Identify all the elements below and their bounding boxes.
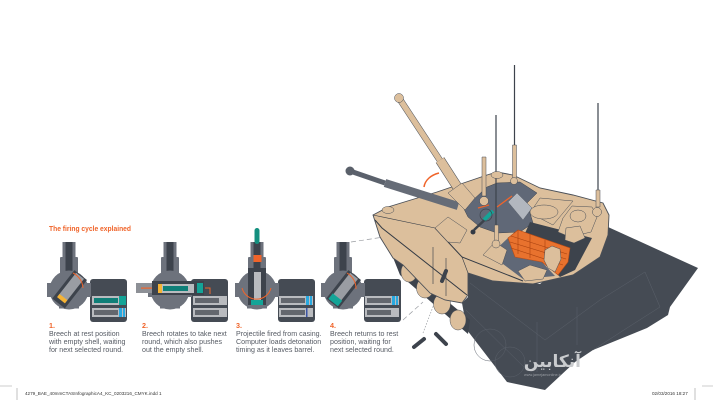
base block (483, 242, 507, 265)
step 3 diagram (235, 228, 315, 322)
step 3 text: timing as it leaves barrel. (236, 346, 314, 354)
commander hatch (530, 198, 597, 243)
hull panel lines (466, 272, 660, 377)
step 2 text: Breech rotates to take next (142, 330, 227, 338)
step 2 text: out the empty shell. (142, 346, 204, 354)
step 1 text (48, 321, 126, 354)
side hatch (435, 217, 467, 243)
grey gun (346, 166, 458, 206)
elevated tan gun (394, 94, 475, 210)
step 1 diagram (47, 242, 127, 322)
step 2 text (142, 321, 227, 354)
step 4 diagram (321, 242, 401, 322)
title: The firing cycle explained (49, 224, 131, 233)
step 3 text (236, 321, 322, 354)
step 4 text: position, waiting for (330, 338, 391, 346)
footer date: 02/03/2016 18:27 (652, 391, 688, 396)
step 2 text: 2. (142, 321, 148, 330)
step 4 text (330, 321, 398, 354)
dark hull (462, 227, 698, 390)
leader lines (351, 237, 442, 333)
watermark: آنکابین (524, 350, 582, 372)
step 1 text: with empty shell, waiting (48, 338, 126, 346)
antennas (382, 65, 602, 248)
wheels (401, 262, 466, 330)
seats near front (518, 246, 561, 281)
step 3 text: 3. (236, 321, 242, 330)
crop marks (0, 386, 713, 400)
left tracks (392, 255, 470, 334)
step 3 text: Computer loads detonation (236, 338, 321, 346)
elevation arrow (424, 173, 439, 187)
step 4 text: Breech returns to rest (330, 330, 398, 338)
step 2 diagram (136, 242, 228, 322)
dark well and lower interior (522, 222, 592, 277)
step 3 text: Projectile fired from casing. (236, 330, 322, 338)
step 1 text: for next selected round. (49, 346, 123, 354)
turret interior (463, 182, 537, 233)
watermark: www.jamejamonline.ir (524, 373, 561, 377)
orange ammunition box (508, 230, 570, 275)
step 4 text: 4. (330, 321, 336, 330)
tan tank body (373, 172, 609, 303)
track pins (414, 271, 446, 347)
step 4 text: next selected round. (330, 346, 394, 354)
ammunition drum (508, 193, 532, 220)
step 2 text: round, which also pushes (142, 338, 223, 346)
footer slug: 4279_BAE_40mmCTASInfographicA4_KC_0203216_CMYK.indd 1 (25, 391, 162, 396)
step 1 text: 1. (49, 321, 55, 330)
gun breech in turret (470, 196, 512, 234)
step 1 text: Breech at rest position (49, 330, 120, 338)
hull lines (373, 215, 523, 296)
